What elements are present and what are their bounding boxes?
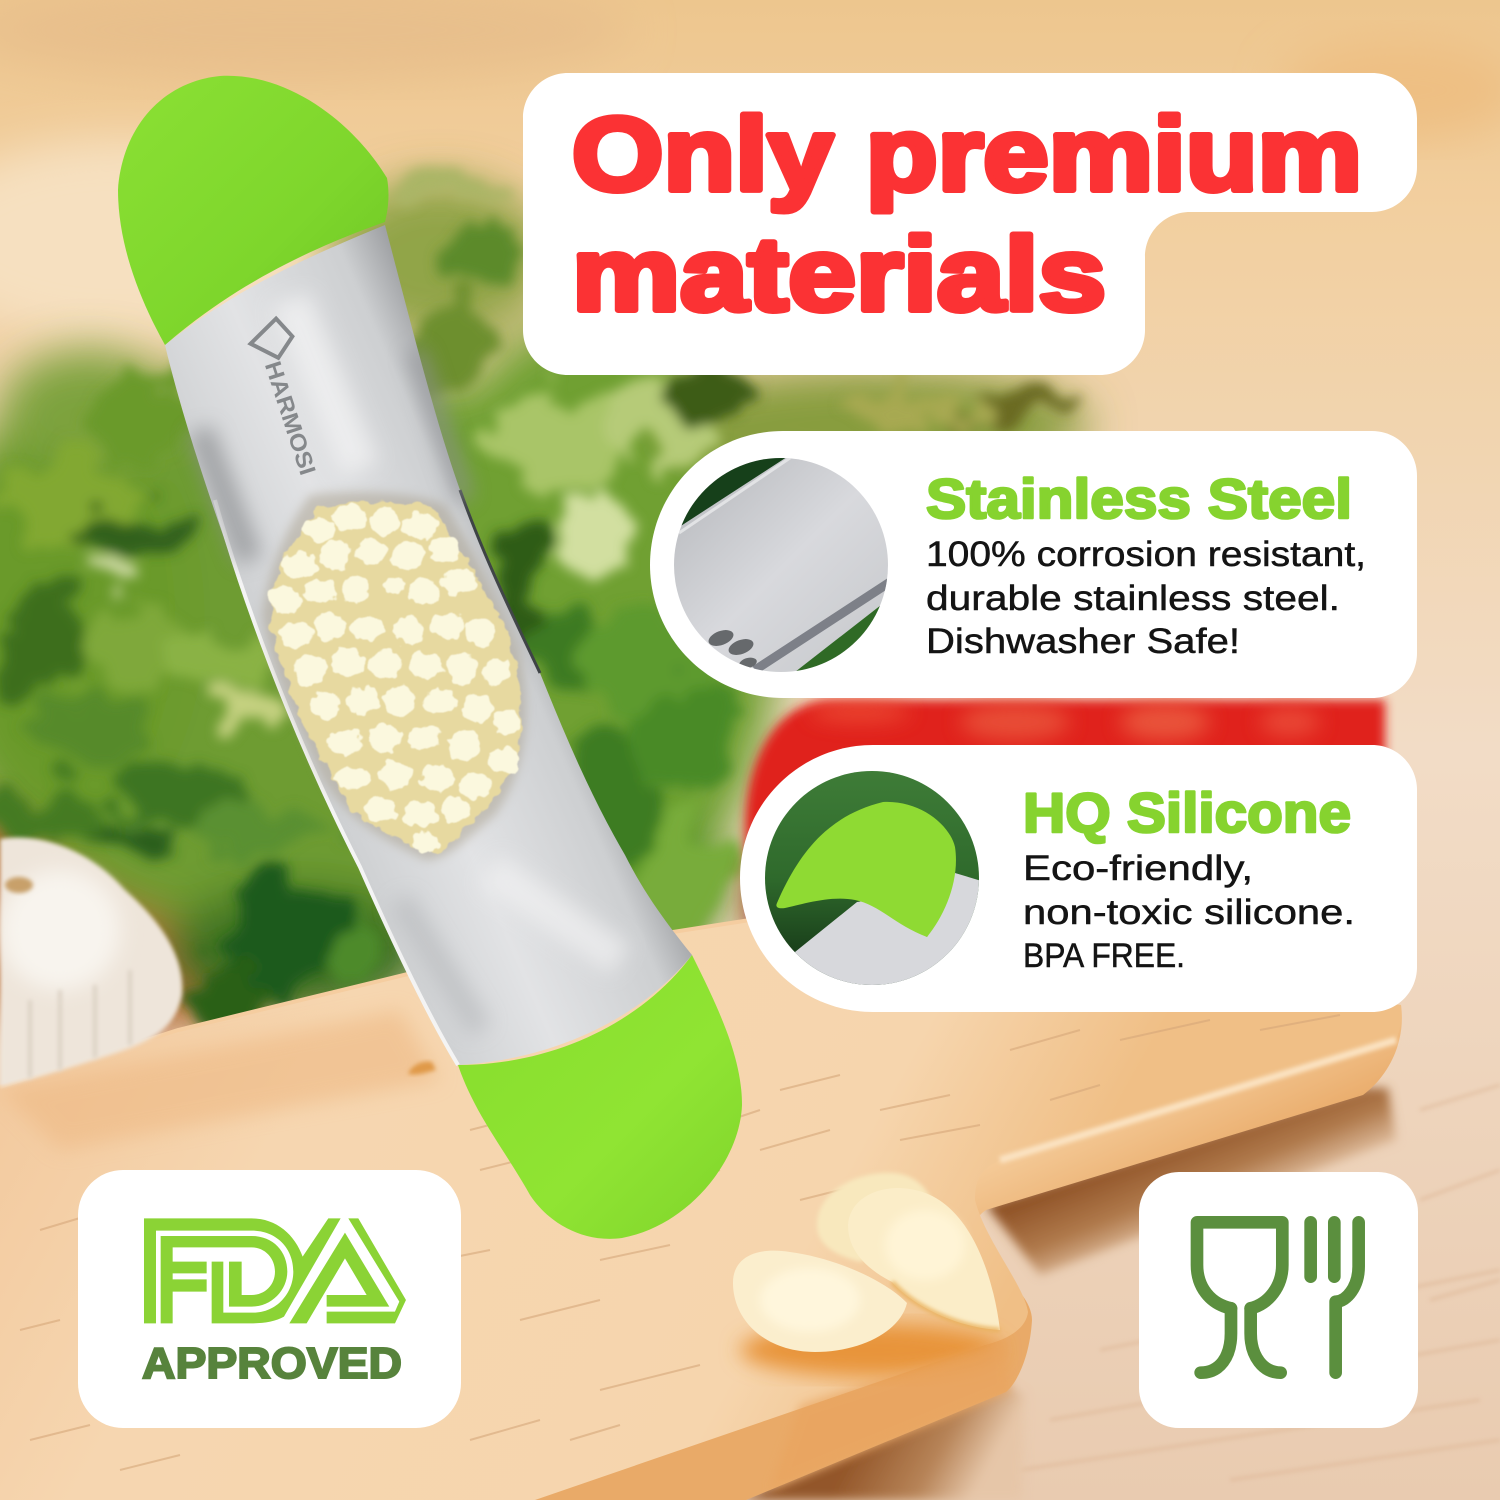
green silicone cap, top (118, 76, 388, 345)
brushed steel shading (200, 300, 620, 1030)
board shadows on table (740, 1088, 1396, 1500)
text: stainless steel (926, 467, 1366, 661)
label: approved: APPROVED (142, 1339, 402, 1388)
cutting board top surface (0, 920, 1401, 1500)
engraved brand: HARMOSI: HARMOSI (260, 358, 321, 478)
crushed garlic (262, 492, 526, 860)
text: stainless steel: durable stainless steel. (926, 579, 1340, 618)
photo: silicone close-up (760, 765, 985, 990)
blade edge lines (215, 500, 458, 1065)
panel: headline (523, 73, 1417, 375)
tomato behind panels (745, 700, 1385, 960)
text: stainless steel: Stainless Steel (926, 467, 1352, 530)
text: HQ silicone: Eco-friendly, (1023, 849, 1253, 888)
cilantro leaves, blurred (0, 180, 1090, 1015)
heading text: Only premium (572, 97, 1362, 213)
cutting board side (0, 920, 1402, 1500)
panel: HQ silicone (740, 745, 1417, 1012)
board shading and grain (0, 920, 1396, 1490)
text: HQ silicone: non-toxic silicone. (1023, 893, 1355, 932)
panel: food-safe icon (1139, 1172, 1418, 1428)
text: stainless steel: Dishwasher Safe! (926, 622, 1240, 661)
panel: stainless steel (650, 431, 1417, 698)
tomato highlights (742, 702, 1320, 950)
garlic cloves (733, 1173, 1000, 1352)
icon: wine glass and fork (1197, 1222, 1359, 1373)
text: HQ silicone (1023, 781, 1355, 975)
green silicone cap, bottom (458, 955, 742, 1239)
tabletop grain (1020, 1085, 1500, 1480)
product: garlic crusher (118, 76, 742, 1239)
text: stainless steel: 100% corrosion resistant, (926, 535, 1366, 574)
engraved brand: HARMOSI (246, 316, 334, 479)
garlic bulb, left (0, 838, 182, 1087)
heading text: materials (572, 217, 1106, 333)
photo: steel close-up (674, 458, 888, 672)
panel: FDA approved (78, 1170, 461, 1428)
tabletop behind leaves, warm edge (0, 770, 380, 1030)
icon: FDA logo (144, 1218, 406, 1323)
text: HQ silicone: HQ Silicone (1023, 781, 1351, 844)
heading text (572, 97, 1362, 333)
text: HQ silicone: BPA FREE. (1023, 937, 1185, 975)
blade: stainless steel body (165, 225, 692, 1065)
